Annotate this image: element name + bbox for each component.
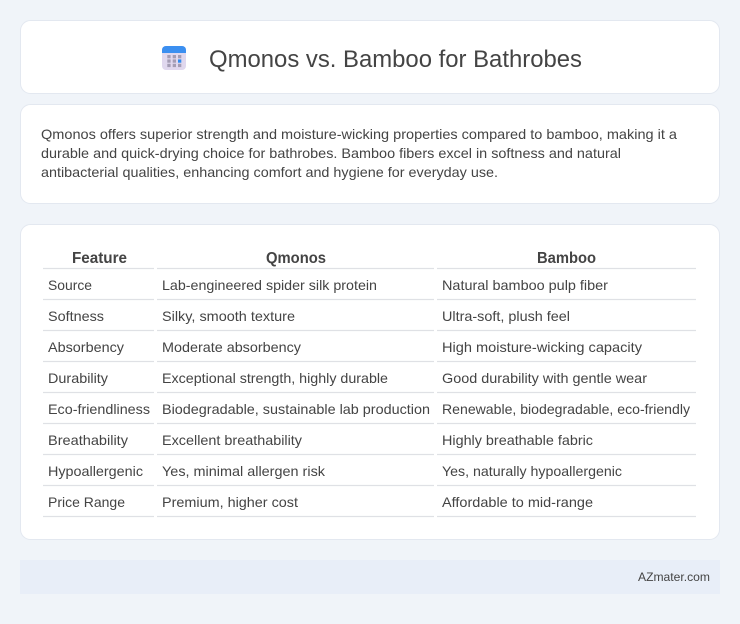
row: Eco-friendliness: Biodegradable, sustainable lab production — [162, 401, 430, 417]
row: Breathability: Highly breathable fabric — [442, 432, 593, 448]
row: Absorbency: Absorbency — [48, 339, 124, 355]
intro text: antibacterial qualities, enhancing comfort and hygiene for everyday use. — [41, 164, 498, 180]
row: Hypoallergenic: Yes, naturally hypoallergenic — [442, 463, 622, 479]
row: Breathability: Excellent breathability — [162, 432, 302, 448]
row: Hypoallergenic: Hypoallergenic — [48, 463, 143, 479]
row: Price Range: Affordable to mid-range — [442, 494, 593, 510]
row: Softness: Softness — [48, 308, 104, 324]
row: Eco-friendliness: Renewable, biodegradable, eco-friendly — [442, 401, 690, 417]
footer credit: AZmater.com — [638, 570, 710, 584]
row: Source — [48, 277, 608, 293]
row: Durability: Durability — [48, 370, 108, 386]
intro text — [41, 126, 677, 180]
row: Absorbency: Moderate absorbency — [162, 339, 301, 355]
intro text: durable and quick-drying choice for bathrobes. Bamboo fibers excel in softness and natural — [41, 145, 621, 161]
row: Source: Source — [48, 277, 92, 293]
row: Source: Lab-engineered spider silk protein — [162, 277, 377, 293]
row: Eco-friendliness: Eco-friendliness — [48, 401, 150, 417]
row: Absorbency: High moisture-wicking capacity — [442, 339, 642, 355]
row: Softness: Ultra-soft, plush feel — [442, 308, 570, 324]
icon: calendar — [162, 46, 186, 70]
intro text: Qmonos offers superior strength and moisture-wicking properties compared to bamboo, making it a — [41, 126, 677, 142]
row: Eco-friendliness — [48, 401, 690, 417]
row: Softness: Silky, smooth texture — [162, 308, 295, 324]
row: Durability: Exceptional strength, highly durable — [162, 370, 388, 386]
table header: Feature — [72, 250, 127, 267]
panel: title card — [20, 20, 720, 94]
row: Hypoallergenic: Yes, minimal allergen risk — [162, 463, 326, 479]
row: Breathability: Breathability — [48, 432, 128, 448]
row: Price Range: Premium, higher cost — [162, 494, 298, 510]
row: Price Range — [48, 494, 593, 510]
table rules — [43, 268, 696, 516]
table header: Bamboo — [537, 250, 596, 267]
row: Breathability — [48, 432, 593, 448]
row: Durability — [48, 370, 647, 386]
table header: Qmonos — [266, 250, 326, 267]
row: Price Range: Price Range — [48, 494, 125, 510]
row: Hypoallergenic — [48, 463, 622, 479]
table header — [72, 250, 596, 267]
row: Source: Natural bamboo pulp fiber — [442, 277, 608, 293]
panel: comparison table — [20, 224, 720, 540]
row: Softness — [48, 308, 570, 324]
footer bar — [20, 560, 720, 594]
row: Durability: Good durability with gentle wear — [442, 370, 647, 386]
row: Absorbency — [48, 339, 642, 355]
title: Qmonos vs. Bamboo for Bathrobes — [209, 46, 582, 73]
panel: introduction — [20, 104, 720, 204]
